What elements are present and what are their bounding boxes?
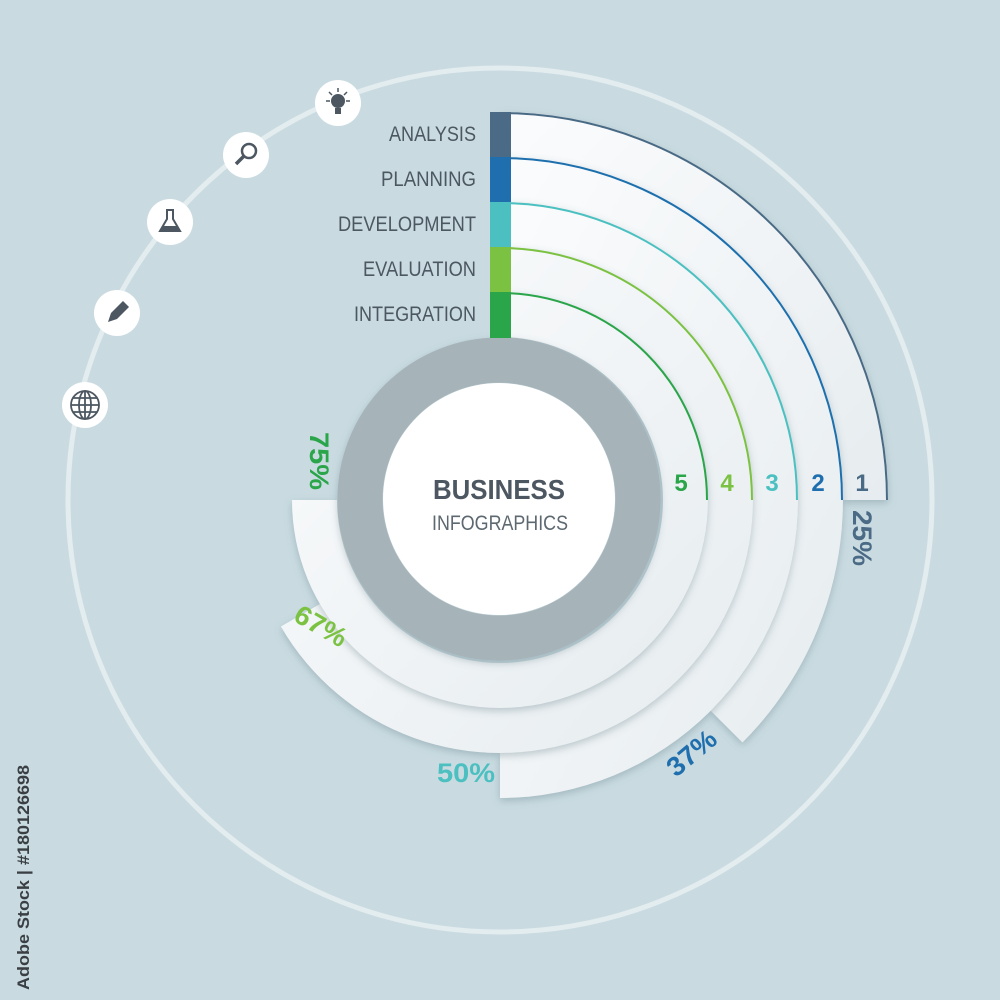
ring 4 evaluation [281, 247, 753, 753]
ring 3 development [500, 202, 798, 798]
stage labels: INTEGRATION [354, 303, 476, 326]
ring 5 integration [292, 292, 708, 708]
ring numbers: 4 [720, 470, 734, 497]
center circle: INFOGRAPHICS [432, 512, 568, 535]
color tabs [490, 112, 511, 338]
stage labels: ANALYSIS [389, 123, 476, 146]
stage labels: PLANNING [381, 168, 476, 191]
percent labels: 75% [304, 432, 334, 490]
ring numbers: 1 [855, 470, 869, 497]
stage labels [338, 123, 476, 326]
center circle [383, 383, 615, 615]
ring numbers [674, 470, 869, 497]
icon: magnifier [223, 132, 269, 178]
icon: bulb [315, 80, 361, 126]
watermark id: Adobe Stock | #180126698 [14, 765, 33, 990]
percent labels: 67% [289, 599, 352, 653]
ring 2 planning [500, 157, 843, 742]
stage labels: EVALUATION [363, 258, 476, 281]
ring numbers: 3 [765, 470, 779, 497]
percent labels: 37% [661, 724, 723, 783]
percent labels: 25% [847, 510, 877, 566]
gray ring [360, 360, 638, 638]
center circle: BUSINESS [433, 474, 565, 505]
percent labels: 50% [437, 758, 495, 788]
ring numbers: 2 [811, 470, 825, 497]
stage labels: DEVELOPMENT [338, 213, 476, 236]
ring numbers: 5 [674, 470, 688, 497]
icon: globe [62, 382, 108, 428]
icon: flask [147, 199, 193, 245]
percent labels [289, 432, 877, 788]
ring 1 analysis [500, 112, 888, 500]
outer circle [68, 68, 932, 932]
icon: pencil [94, 290, 140, 336]
